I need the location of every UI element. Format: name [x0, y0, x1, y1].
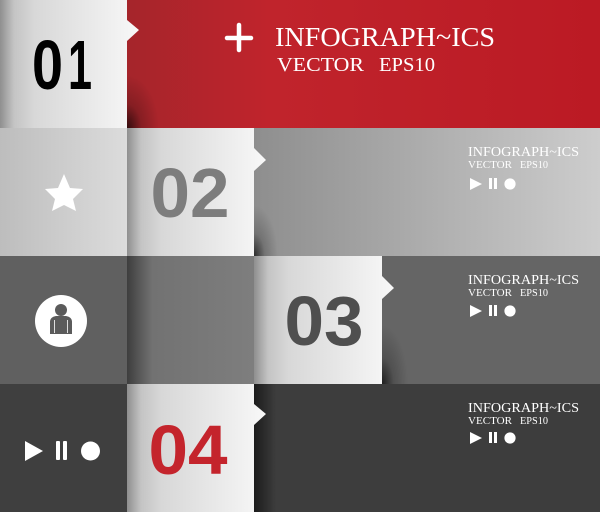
subheading: vector eps10: VECTOR [277, 54, 365, 76]
caption: INFOGRAPH~ICS [468, 273, 579, 288]
dark band [254, 384, 600, 512]
number 01: 0 [32, 26, 63, 104]
number 02: 02 [150, 154, 230, 232]
icon: star [45, 174, 83, 211]
dark grey person cell [0, 256, 127, 384]
caption [468, 273, 579, 299]
caption [468, 145, 579, 171]
mid grey cell [127, 256, 254, 384]
red banner [127, 0, 600, 128]
panel: row 4 [0, 384, 600, 512]
icons: media controls [470, 305, 516, 317]
dark band [382, 256, 600, 384]
caption: VECTOR [468, 159, 513, 171]
caption [468, 401, 579, 427]
number 01 [32, 26, 92, 104]
grey band [254, 128, 600, 256]
icon: plus [227, 25, 251, 50]
icon: person [35, 295, 87, 347]
caption: INFOGRAPH~ICS [468, 145, 579, 160]
number 04: 04 [148, 411, 228, 489]
panel: row 3 [0, 256, 600, 384]
icons: large media controls [25, 441, 100, 461]
white tab 02 [127, 128, 266, 256]
darkest cell [0, 384, 127, 512]
panel: row 2 [0, 128, 600, 256]
caption: EPS10 [520, 287, 548, 299]
caption: INFOGRAPH~ICS [468, 401, 579, 416]
subheading: vector eps10: EPS10 [379, 54, 435, 76]
caption: EPS10 [520, 415, 548, 427]
caption: VECTOR [468, 287, 513, 299]
icons: media controls [470, 432, 516, 444]
number 01: 1 [68, 26, 92, 104]
caption: VECTOR [468, 415, 513, 427]
caption: EPS10 [520, 159, 548, 171]
number 03: 03 [284, 282, 364, 360]
icons: media controls [470, 178, 516, 190]
panel: row 1 [0, 0, 600, 128]
white tab 04 [127, 384, 266, 512]
white tab 01 [0, 0, 139, 128]
white tab 03 [254, 256, 394, 384]
heading: infographics: INFOGRAPH~ICS [275, 22, 495, 52]
grey star cell [0, 128, 127, 256]
